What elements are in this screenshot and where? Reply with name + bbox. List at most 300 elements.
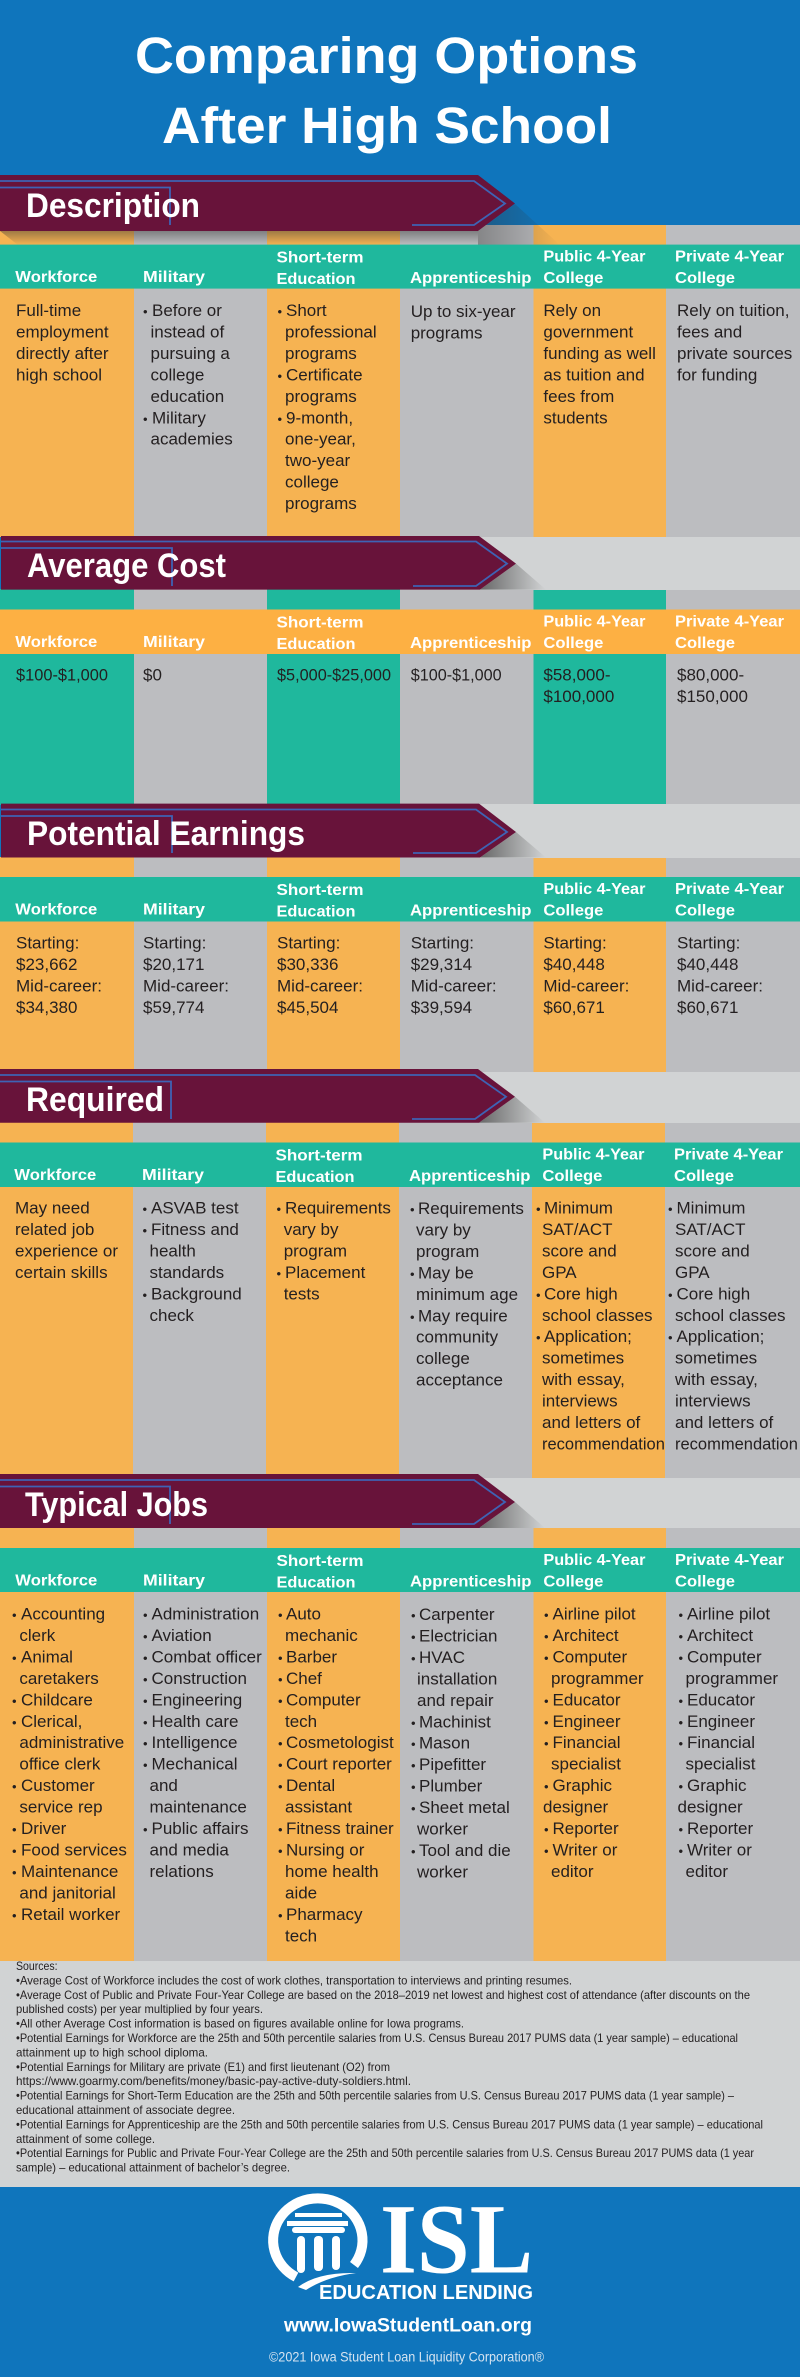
column text: Private 4-Year College: •: [678, 1650, 684, 1665]
column text: Private 4-Year College: Graphic: [687, 1776, 747, 1795]
column text: Military: •: [143, 1629, 148, 1644]
section banner: Average Cost: [1, 536, 516, 590]
cost values: $100-$1,000: [16, 666, 108, 684]
column text: Apprenticeship: •: [411, 1801, 416, 1816]
panel: sources: educational attainment of associate degree.: [16, 2103, 235, 2117]
column text: Workforce: Maintenance: [21, 1862, 118, 1881]
column text: Public 4-Year College: Computer: [552, 1647, 627, 1666]
column headers: Apprenticeship: [410, 902, 532, 919]
website url: www.IowaStudentLoan.org: [283, 2316, 532, 2337]
column text: Public 4-Year College: government: [543, 322, 633, 341]
earnings values: $30,336: [277, 955, 338, 974]
column text: Private 4-Year College: fees and: [677, 322, 742, 341]
column text: Military: Intelligence: [152, 1733, 238, 1752]
column text: Short-term Education: Certificate: [286, 365, 363, 384]
column text: Military: Public affairs: [152, 1819, 249, 1838]
column text: Military: Military: [152, 408, 206, 427]
column text: Public 4-Year College: •: [544, 1715, 549, 1730]
column text: Short-term Education: programs: [285, 344, 357, 363]
column text: Short-term Education: mechanic: [285, 1626, 358, 1645]
column text: Apprenticeship: •: [411, 1715, 416, 1730]
column text: Private 4-Year College: •: [668, 1330, 673, 1345]
cost values: [16, 666, 748, 706]
column text: Workforce: directly after: [16, 344, 109, 363]
column stripes: [0, 589, 800, 805]
earnings values: [16, 934, 763, 1017]
column headers: College: [543, 635, 603, 652]
column text: Short-term Education: •: [278, 1672, 283, 1687]
column text: Apprenticeship: Tool and die: [419, 1841, 511, 1860]
column text: Private 4-Year College: Writer or: [687, 1840, 752, 1859]
cost values: $0: [143, 666, 162, 684]
column headers: College: [543, 1573, 603, 1590]
column text: Short-term Education: Cosmetologist: [286, 1733, 394, 1752]
column text: Private 4-Year College: Core high: [676, 1284, 750, 1303]
panel: sources: published costs) per year multiplied by four years.: [16, 2002, 263, 2016]
column text: Workforce: Driver: [21, 1819, 67, 1838]
column text: Apprenticeship: Pipefitter: [419, 1755, 486, 1774]
column headers: Education: [276, 636, 356, 653]
column text: Public 4-Year College: funding as well: [543, 344, 656, 363]
column text: Workforce: Animal: [21, 1647, 73, 1666]
column headers: Education: [276, 903, 356, 920]
column headers: Education: [276, 1169, 354, 1186]
panel: sources: •Potential Earnings for Workforce are the 25th and 50th percentile salaries from U.S. Census Bureau 2017 PUMS data (1 year sample) – educational: [16, 2031, 738, 2045]
column headers: [0, 877, 800, 922]
column text: Military: •: [143, 1736, 148, 1751]
title: [135, 27, 638, 154]
column text: Apprenticeship: Sheet metal: [419, 1798, 510, 1817]
banner backdrop band: [480, 1478, 800, 1528]
column text: Public 4-Year College: Architect: [552, 1626, 619, 1645]
cost values: $5,000-$25,000: [277, 666, 391, 684]
column text: Short-term Education: aide: [285, 1883, 317, 1902]
column text: Apprenticeship: •: [411, 1608, 416, 1623]
section banner: Typical Jobs: Typical Jobs: [25, 1486, 208, 1524]
column text: Public 4-Year College: school classes: [542, 1306, 653, 1325]
title: Comparing Options: [135, 27, 638, 84]
column headers: [0, 245, 800, 289]
panel: sources: •All other Average Cost information is based on figures available online for Iowa programs.: [16, 2017, 464, 2031]
column headers: Military: [143, 901, 205, 918]
panel: sources: •Average Cost of Public and Private Four-Year College are based on the 2018–2019 net lowest and highest cost of attendance (after discounts on the: [16, 1988, 750, 2002]
column text: Public 4-Year College: fees from: [543, 387, 614, 406]
column text: Short-term Education: tests: [284, 1284, 320, 1303]
column text: Workforce: •: [12, 1908, 17, 1923]
column headers: Apprenticeship: [410, 635, 532, 652]
earnings values: Starting:: [677, 934, 740, 952]
column text: Private 4-Year College: Minimum: [676, 1198, 745, 1218]
column text: Apprenticeship: HVAC: [419, 1648, 465, 1667]
column stripes: [0, 225, 800, 537]
earnings values: Mid-career:: [543, 976, 629, 995]
column text: Public 4-Year College: SAT/ACT: [542, 1220, 613, 1239]
column text: Short-term Education: home health: [285, 1862, 379, 1881]
earnings values: Starting:: [543, 934, 607, 952]
column headers: Workforce: [15, 1572, 97, 1589]
column text: Military: Fitness and: [151, 1220, 239, 1239]
column text: Short-term Education: Computer: [286, 1690, 361, 1709]
column text: Apprenticeship: Electrician: [419, 1626, 497, 1645]
column text: Military: health: [150, 1241, 196, 1260]
column text: Workforce: •: [12, 1608, 17, 1622]
column text: Short-term Education: Dental: [286, 1776, 335, 1795]
column headers: Public 4-Year: [543, 1552, 645, 1569]
section banner: Required: Required: [26, 1081, 164, 1119]
banner shadow: [0, 204, 560, 245]
earnings values: $40,448: [677, 955, 738, 974]
section banner: Description: [0, 175, 515, 231]
column text: Short-term Education: Pharmacy: [286, 1905, 363, 1924]
banner shadow: [480, 564, 546, 590]
column text: Apprenticeship: •: [411, 1758, 416, 1773]
column text: Private 4-Year College: •: [678, 1822, 684, 1837]
column text: Public 4-Year College: and letters of: [542, 1413, 641, 1432]
panel: sources: https://www.goarmy.com/benefits/money/basic-pay-active-duty-soldiers.html.: [16, 2074, 411, 2088]
column text: Public 4-Year College: •: [544, 1736, 549, 1751]
logo tagline: EDUCATION LENDING: [319, 2282, 533, 2304]
column text: Short-term Education: •: [278, 411, 282, 426]
column text: Short-term Education: Court reporter: [286, 1755, 392, 1774]
column text: Military: pursuing a: [150, 344, 230, 363]
column headers: Short-term: [276, 1553, 364, 1570]
banner backdrop band: [480, 804, 800, 858]
column text: Private 4-Year College: •: [668, 1287, 673, 1302]
column text: Private 4-Year College: and letters of: [675, 1413, 774, 1432]
column headers: Education: [276, 271, 356, 288]
column text: Private 4-Year College: sometimes: [675, 1349, 757, 1368]
column text: Short-term Education: •: [278, 1650, 283, 1665]
column headers: Public 4-Year: [543, 614, 645, 630]
column text: Military: •: [142, 1223, 148, 1238]
column text: Private 4-Year College: •: [678, 1779, 684, 1794]
column text: Workforce: high school: [16, 365, 102, 384]
column text: Private 4-Year College: with essay,: [674, 1370, 758, 1389]
column headers: Private 4-Year: [675, 614, 784, 630]
column text: Apprenticeship: installation: [417, 1669, 497, 1688]
column text: Short-term Education: program: [284, 1241, 347, 1260]
column text: Public 4-Year College: •: [536, 1330, 541, 1345]
column text: Military: •: [143, 1608, 148, 1622]
cost values: $58,000-: [543, 666, 611, 684]
column headers: College: [675, 270, 735, 287]
column text: Military: Background: [151, 1284, 242, 1303]
earnings values: Mid-career:: [16, 976, 102, 995]
panel: Average Cost: [0, 536, 800, 805]
column text: Workforce: caretakers: [19, 1669, 99, 1688]
column text: Military: check: [150, 1306, 194, 1325]
column text: Public 4-Year College: •: [544, 1693, 549, 1708]
column text: Short-term Education: •: [278, 1736, 283, 1751]
column headers: Workforce: [15, 269, 97, 286]
column text: Short-term Education: •: [278, 1608, 283, 1622]
column text: Private 4-Year College: school classes: [675, 1306, 786, 1325]
column text: Public 4-Year College: Application;: [544, 1327, 632, 1346]
column stripes: [0, 1528, 800, 1962]
column text: Public 4-Year College: sometimes: [542, 1349, 624, 1368]
column text: Military: relations: [150, 1862, 214, 1881]
column text: Private 4-Year College: •: [668, 1202, 673, 1216]
column headers: [0, 610, 800, 654]
column text: Military: •: [143, 1672, 148, 1687]
column text: Private 4-Year College: •: [678, 1843, 684, 1858]
column text: Military: and media: [150, 1840, 229, 1859]
column text: Short-term Education: programs: [285, 387, 357, 406]
column text: Public 4-Year College: •: [544, 1822, 549, 1837]
column text: Short-term Education: •: [276, 1202, 282, 1216]
column text: Workforce: •: [12, 1715, 17, 1730]
column text: Private 4-Year College: recommendation: [675, 1435, 798, 1453]
cost values: $100,000: [543, 687, 614, 706]
column text: Workforce: •: [12, 1779, 17, 1794]
column headers: Short-term: [276, 882, 364, 899]
column text: Military: Aviation: [152, 1626, 212, 1645]
column text: Apprenticeship: minimum age: [416, 1285, 518, 1304]
column stripes: [0, 1122, 800, 1478]
column headers: Workforce: [15, 901, 97, 918]
column text: Public 4-Year College: •: [536, 1287, 541, 1302]
column text: Workforce: •: [12, 1843, 17, 1858]
column text: Private 4-Year College: •: [678, 1736, 684, 1751]
earnings values: Mid-career:: [411, 976, 497, 995]
column text: Military: Engineering: [152, 1690, 242, 1709]
column text: Private 4-Year College: Application;: [676, 1327, 764, 1346]
column text: Workforce: administrative: [19, 1733, 124, 1752]
column headers: College: [675, 635, 735, 652]
column text: Workforce: Accounting: [21, 1604, 105, 1624]
column text: Public 4-Year College: programmer: [551, 1669, 644, 1688]
column text: Short-term Education: •: [278, 1758, 283, 1773]
column text: Military: Before or: [152, 301, 222, 320]
panel: sources: •Potential Earnings for Short-Term Education are the 25th and 50th percentile salaries from U.S. Census Bureau 2017 PUMS data (1 year sample) –: [16, 2089, 734, 2103]
column text: Short-term Education: •: [278, 1693, 283, 1708]
column text: Apprenticeship: •: [410, 1202, 415, 1217]
column text: Apprenticeship: and repair: [417, 1691, 494, 1710]
panel: sources: sample) – educational attainment of bachelor’s degree.: [16, 2161, 290, 2175]
column text: Short-term Education: Nursing or: [286, 1840, 365, 1859]
column text: Private 4-Year College: editor: [686, 1862, 728, 1881]
column text: Public 4-Year College: •: [544, 1650, 549, 1665]
column text: Apprenticeship: •: [411, 1737, 416, 1752]
column text: Private 4-Year College: GPA: [675, 1263, 710, 1282]
column text: Military: •: [143, 1822, 148, 1837]
panel: Required: [0, 1069, 800, 1478]
column text: Public 4-Year College: GPA: [542, 1263, 577, 1282]
column headers: College: [675, 902, 735, 919]
column text: Military: instead of: [150, 322, 224, 341]
column text: Short-term Education: vary by: [284, 1220, 339, 1239]
column headers: Apprenticeship: [409, 1168, 531, 1185]
footer: logo and contact: [269, 2184, 545, 2365]
column headers: College: [543, 270, 603, 287]
column headers: Short-term: [276, 614, 364, 632]
cost values: $150,000: [677, 687, 748, 706]
earnings values: Mid-career:: [143, 976, 229, 995]
column text: Apprenticeship: worker: [416, 1862, 468, 1881]
column text: Apprenticeship: •: [410, 1309, 415, 1324]
earnings values: Mid-career:: [277, 976, 363, 995]
column text: Private 4-Year College: interviews: [675, 1392, 751, 1411]
column text: Military: •: [142, 1202, 148, 1216]
column text: Public 4-Year College: interviews: [542, 1392, 618, 1411]
column text: Workforce: Retail worker: [21, 1905, 121, 1924]
column text: Military: Construction: [152, 1669, 247, 1688]
column headers: Military: [142, 1167, 204, 1184]
column text: Short-term Education: Requirements: [285, 1198, 391, 1218]
section banner: Potential Earnings: Potential Earnings: [27, 815, 305, 853]
earnings values: $45,504: [277, 998, 338, 1017]
column text: Private 4-Year College: •: [678, 1693, 684, 1708]
column headers: Short-term: [276, 1148, 362, 1164]
panel: sources: [0, 1959, 800, 2187]
column text: Private 4-Year College: score and: [675, 1241, 750, 1260]
column text: Public 4-Year College: Engineer: [552, 1712, 621, 1731]
column headers: [0, 1142, 800, 1187]
column text: Private 4-Year College: Engineer: [687, 1712, 755, 1731]
column text: Military: and: [150, 1776, 178, 1795]
column text: Military: education: [150, 387, 224, 406]
banner backdrop band: [480, 537, 800, 590]
column text: Military: maintenance: [150, 1798, 247, 1817]
column headers: Apprenticeship: [410, 270, 532, 287]
column text: Short-term Education: •: [276, 1266, 282, 1281]
column text: Short-term Education: •: [278, 304, 282, 319]
column text: Apprenticeship: programs: [411, 323, 483, 342]
column text: Short-term Education: Chef: [286, 1669, 322, 1688]
column text: Workforce: employment: [16, 322, 109, 341]
column text: Short-term Education: one-year,: [285, 430, 356, 449]
section banner: Required: [0, 1069, 515, 1123]
column text: Public 4-Year College: Rely on: [543, 301, 601, 320]
banner backdrop band: [480, 1072, 800, 1123]
column text: Apprenticeship: worker: [416, 1820, 468, 1838]
panel: Typical Jobs: [0, 1474, 800, 1962]
panel: sources: •Potential Earnings for Military are private (E1) and first lieutenant (O2) from: [16, 2060, 390, 2074]
column text: Workforce: May need: [15, 1198, 90, 1218]
column text: Public 4-Year College: specialist: [551, 1755, 621, 1774]
section banner: Description: Description: [26, 187, 200, 225]
earnings values: $60,671: [677, 998, 738, 1017]
column text: Apprenticeship: Plumber: [419, 1777, 483, 1796]
column text: Short-term Education: •: [278, 368, 282, 383]
earnings values: $29,314: [411, 955, 472, 974]
section banner: Typical Jobs: [0, 1474, 515, 1528]
earnings values: $34,380: [16, 998, 77, 1017]
logo wordmark: ISL: [380, 2184, 533, 2295]
column headers: Military: [143, 634, 205, 651]
column text: Private 4-Year College: private sources: [677, 344, 792, 363]
cost values: $100-$1,000: [411, 666, 502, 684]
column text: Workforce: •: [12, 1865, 17, 1880]
column text: Apprenticeship: Up to six-year: [411, 302, 516, 321]
panel: Potential Earnings: [0, 804, 800, 1073]
earnings values: $59,774: [143, 998, 204, 1017]
column headers: Private 4-Year: [674, 1146, 783, 1164]
column text: Military: college: [150, 365, 204, 384]
column text: Short-term Education: assistant: [285, 1798, 352, 1817]
column text: Private 4-Year College: Computer: [687, 1647, 762, 1666]
column text: Workforce: Full-time: [16, 301, 81, 320]
column text: Workforce: Childcare: [21, 1690, 93, 1709]
column text: Workforce: •: [12, 1822, 17, 1837]
column text: Private 4-Year College: designer: [678, 1798, 743, 1817]
column text: Short-term Education: Short: [286, 301, 327, 320]
column text: Workforce: service rep: [19, 1798, 103, 1817]
column text: Military: •: [143, 1715, 148, 1730]
earnings values: $23,662: [16, 955, 77, 974]
column text: Short-term Education: programs: [285, 494, 357, 513]
column text: Public 4-Year College: students: [543, 408, 608, 427]
column text: Private 4-Year College: Rely on tuition,: [677, 301, 789, 320]
earnings values: $60,671: [543, 998, 605, 1017]
column text: Short-term Education: tech: [285, 1712, 317, 1731]
column text: Workforce: •: [12, 1650, 17, 1665]
column text: Apprenticeship: •: [410, 1266, 415, 1281]
column text: Military: Mechanical: [152, 1755, 238, 1774]
column text: Workforce: clerk: [19, 1626, 56, 1645]
column text: Private 4-Year College: Architect: [687, 1626, 753, 1645]
column text: Workforce: Customer: [21, 1776, 95, 1795]
column text: Public 4-Year College: recommendation: [542, 1435, 665, 1453]
column text: Private 4-Year College: Financial: [687, 1733, 755, 1752]
column text: Public 4-Year College: •: [544, 1608, 549, 1622]
column text: Public 4-Year College: Financial: [552, 1733, 621, 1752]
column text: Public 4-Year College: •: [544, 1843, 549, 1858]
column headers: Private 4-Year: [675, 1552, 784, 1569]
column text: Apprenticeship: •: [411, 1651, 416, 1666]
column text: Public 4-Year College: •: [544, 1629, 549, 1644]
column text: Military: academies: [150, 430, 233, 449]
earnings values: Starting:: [16, 934, 79, 952]
column text: Apprenticeship: May be: [418, 1263, 474, 1282]
column text: Public 4-Year College: editor: [551, 1862, 594, 1881]
column text: Apprenticeship: program: [416, 1242, 479, 1261]
column text: Private 4-Year College: Reporter: [687, 1819, 753, 1838]
column text: Military: standards: [150, 1263, 224, 1282]
column text: Public 4-Year College: •: [536, 1202, 541, 1216]
column text: Short-term Education: Placement: [285, 1263, 366, 1282]
column text: Apprenticeship: •: [411, 1844, 416, 1859]
banner shadow: [480, 832, 546, 858]
panel: sources: •Average Cost of Workforce includes the cost of work clothes, transportation to interviews and printing resumes.: [16, 1973, 572, 1987]
column text: Workforce: certain skills: [15, 1263, 108, 1282]
column text: Private 4-Year College: •: [678, 1715, 684, 1730]
column text: Short-term Education: •: [278, 1779, 283, 1794]
cost values: $80,000-: [677, 666, 744, 684]
column text: Public 4-Year College: as tuition and: [543, 365, 645, 384]
earnings values: Starting:: [143, 934, 206, 952]
column text: Workforce: Clerical,: [21, 1712, 82, 1731]
title: After High School: [162, 97, 612, 154]
column text: Apprenticeship: Requirements: [418, 1199, 524, 1218]
column text: Public 4-Year College: Core high: [544, 1284, 618, 1303]
column headers: Public 4-Year: [543, 881, 645, 898]
column text: Military: Combat officer: [152, 1647, 262, 1666]
column text: Military: Administration: [152, 1604, 259, 1624]
column text: Public 4-Year College: Airline pilot: [552, 1604, 636, 1624]
column text: Short-term Education: 9-month,: [286, 408, 353, 427]
earnings values: Starting:: [411, 934, 474, 952]
column text: Apprenticeship: community: [416, 1328, 499, 1347]
column headers: Public 4-Year: [542, 1146, 644, 1164]
column text: Short-term Education: Barber: [286, 1647, 337, 1666]
column text: Workforce: related job: [15, 1220, 94, 1239]
column headers: Education: [276, 1574, 356, 1591]
column headers: College: [675, 1573, 735, 1590]
column text: Short-term Education: •: [278, 1822, 283, 1837]
column text: Apprenticeship: May require: [418, 1306, 508, 1325]
column text: Short-term Education: tech: [285, 1926, 317, 1945]
